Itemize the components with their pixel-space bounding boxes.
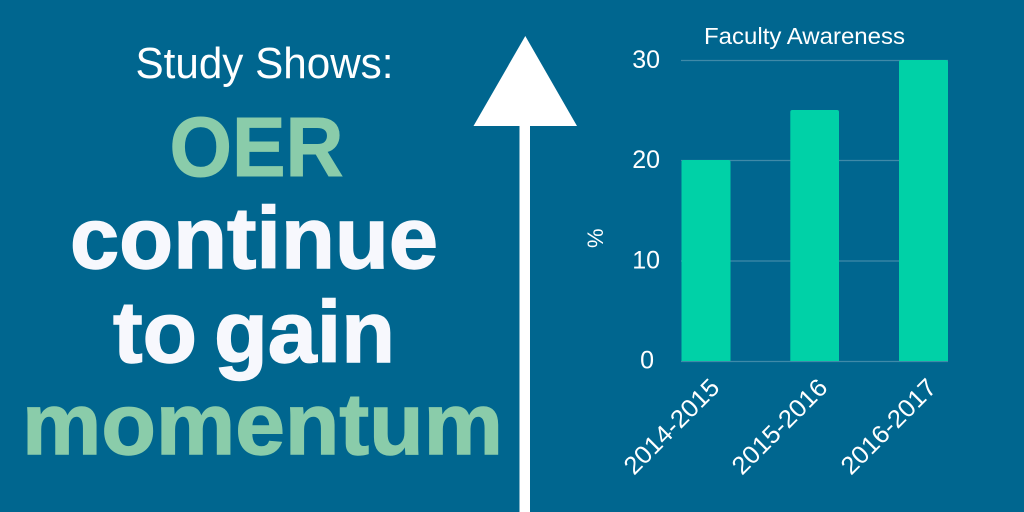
headline word: OER: OER xyxy=(170,100,344,194)
y-axis tick labels xyxy=(632,46,660,374)
headline xyxy=(22,39,503,473)
x-axis category labels xyxy=(618,373,942,480)
headline line: to gain: to xyxy=(113,284,197,381)
bar: 2014-2015 xyxy=(682,160,730,361)
y-axis tick labels: 10 xyxy=(632,246,660,274)
y-axis gridlines xyxy=(681,60,948,362)
bar: 2016-2017 xyxy=(899,60,948,361)
y-axis label: % xyxy=(583,228,608,248)
headline line: to gain xyxy=(113,284,395,381)
bar chart: Faculty Awareness xyxy=(583,23,948,480)
headline line: continue: continue xyxy=(70,190,438,287)
icon: upward arrow xyxy=(474,36,577,512)
bar: 2015-2016 xyxy=(790,110,839,361)
y-axis tick labels: 20 xyxy=(632,146,660,174)
x-axis category labels: 2016-2017 xyxy=(835,373,942,480)
headline word: momentum: momentum xyxy=(22,376,503,473)
x-axis category labels: 2015-2016 xyxy=(726,373,833,480)
y-axis tick labels: 0 xyxy=(640,346,654,374)
headline line: to gain: gain xyxy=(214,284,395,381)
x-axis category labels: 2014-2015 xyxy=(618,373,725,480)
y-axis tick labels: 30 xyxy=(632,46,660,74)
chart title: Faculty Awareness xyxy=(704,23,905,49)
subtitle: Study Shows: Study Shows: xyxy=(136,39,394,88)
